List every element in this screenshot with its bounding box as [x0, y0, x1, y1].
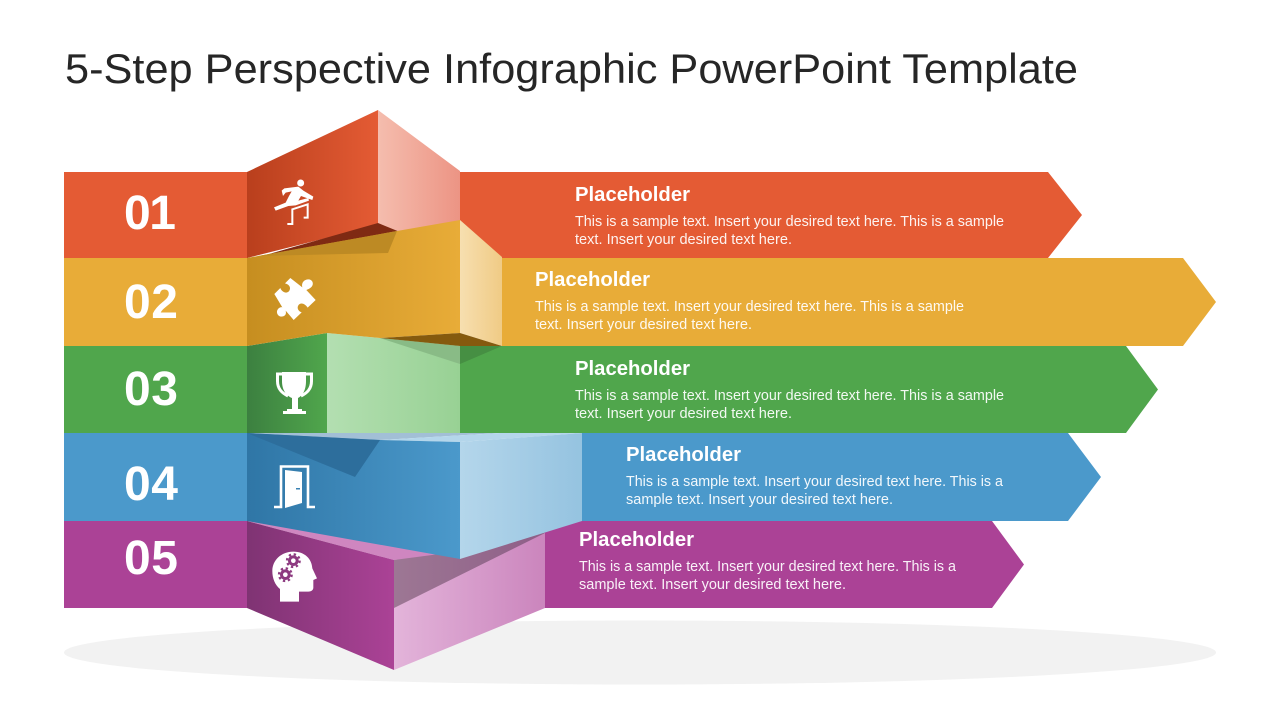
text block: step 4: Placeholder — [626, 444, 741, 466]
text block: step 4 — [626, 444, 1004, 508]
step 3 green band — [64, 346, 1158, 433]
icon: hurdle runner — [274, 179, 313, 224]
ground shadow ellipse — [64, 620, 1216, 684]
text block: step 2 — [535, 269, 964, 333]
text block: step 2: Placeholder — [535, 269, 650, 291]
icon: head with gears — [272, 552, 317, 602]
icon: trophy — [278, 372, 312, 414]
step 4 blue band — [64, 433, 1101, 521]
perspective block 1 red — [247, 110, 460, 258]
text block: step 1: text. Insert your desired text here. — [575, 232, 792, 248]
text block: step 5: This is a sample text. Insert your desired text here. This is a — [579, 559, 957, 575]
text block: step 1: Placeholder — [575, 184, 690, 206]
perspective block 4 blue — [247, 433, 582, 559]
text block: step 5: sample text. Insert your desired text here. — [579, 577, 846, 593]
icon: puzzle piece — [274, 278, 316, 320]
text block: step 2: text. Insert your desired text here. — [535, 317, 752, 333]
text block: step 4: This is a sample text. Insert your desired text here. This is a — [626, 474, 1004, 490]
text block: step 4: sample text. Insert your desired text here. — [626, 492, 893, 508]
number 04: 04 — [124, 458, 178, 511]
perspective block 2 orange — [247, 220, 502, 346]
text block: step 1 — [575, 184, 1004, 248]
perspective block 3 green — [247, 333, 502, 433]
number 03: 03 — [124, 363, 178, 416]
icon: door — [274, 466, 315, 508]
number 02: 02 — [124, 276, 178, 329]
step 5 purple band — [64, 521, 1024, 608]
text block: step 1: This is a sample text. Insert your desired text here. This is a sample — [575, 214, 1004, 230]
text block: step 3 — [575, 358, 1004, 422]
text block: step 3: Placeholder — [575, 358, 690, 380]
text block: step 5 — [579, 529, 957, 593]
text block: step 3: text. Insert your desired text here. — [575, 406, 792, 422]
text block: step 5: Placeholder — [579, 529, 694, 551]
title: 5-Step Perspective Infographic PowerPoint Template — [65, 45, 1078, 92]
text block: step 3: This is a sample text. Insert your desired text here. This is a sample — [575, 388, 1004, 404]
step 1 red band — [64, 172, 1082, 258]
text block: step 2: This is a sample text. Insert your desired text here. This is a sample — [535, 299, 964, 315]
number 01: 01 — [124, 187, 176, 240]
step 2 orange band — [64, 258, 1216, 346]
perspective block 5 purple — [247, 521, 545, 670]
number 05: 05 — [124, 532, 178, 585]
